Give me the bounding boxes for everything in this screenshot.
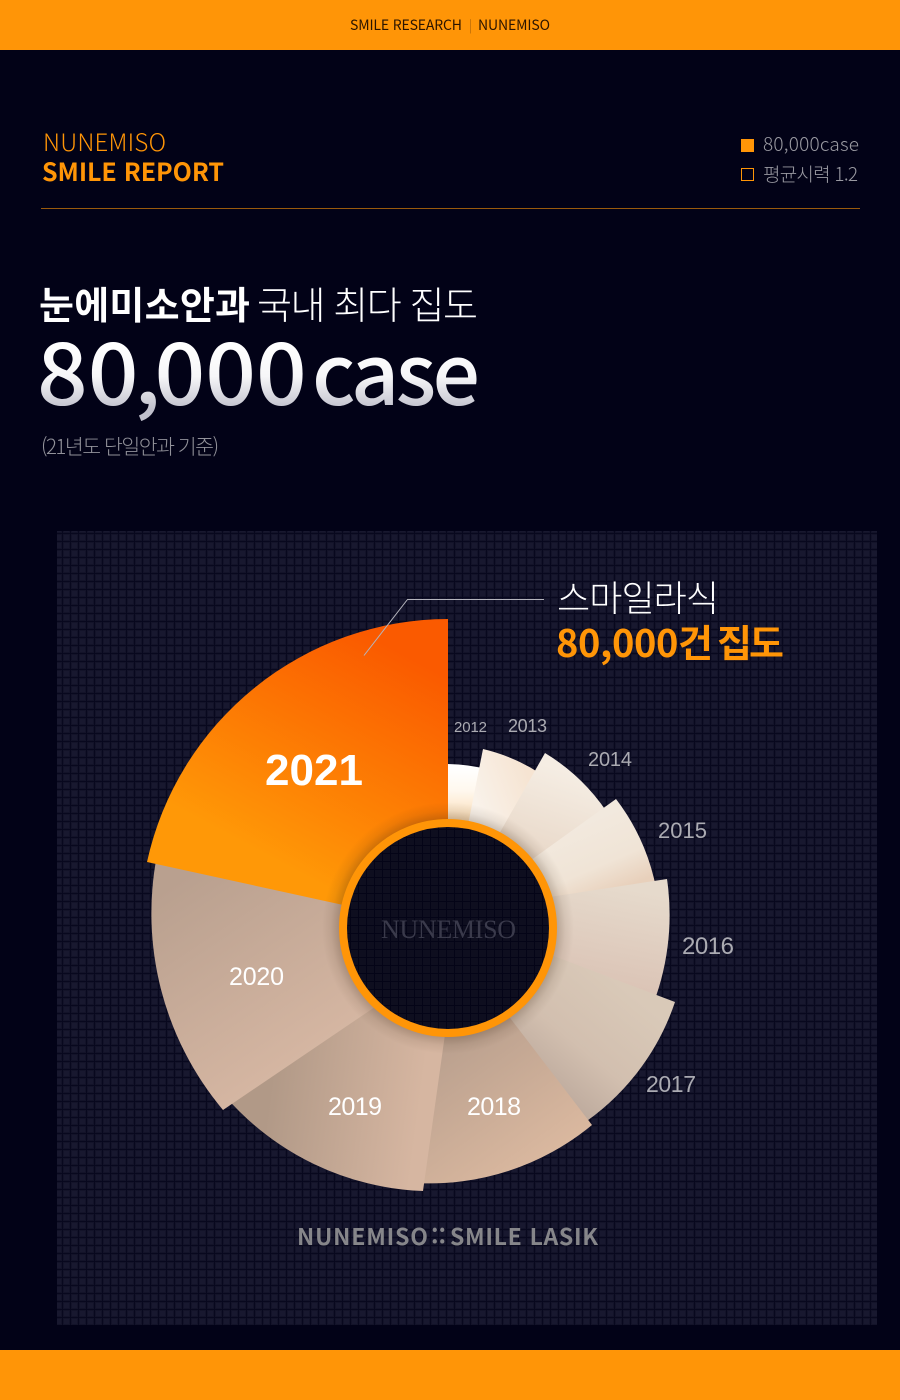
year labels: 2013 <box>508 716 547 736</box>
headline: 눈에미소안과 <box>39 275 250 330</box>
year labels: 2020 <box>229 963 284 991</box>
top bar <box>0 0 900 50</box>
slice 2013 <box>465 749 541 850</box>
report heading <box>42 123 224 189</box>
slice 2012 <box>448 764 490 840</box>
big number: case <box>312 309 480 430</box>
year labels: 2019 <box>328 1093 382 1121</box>
slice 2017 <box>500 947 675 1127</box>
report heading: NUNEMISO <box>43 123 166 158</box>
chart caption: SMILE LASIK <box>450 1218 598 1252</box>
top bar text: | <box>469 15 472 34</box>
slice 2015 <box>520 799 658 920</box>
legend <box>741 130 859 187</box>
footnote: (21년도 단일안과 기준) <box>41 430 219 460</box>
callout value <box>556 613 784 668</box>
slice 2018 <box>415 1010 592 1183</box>
callout leader line <box>364 600 544 656</box>
center brand: NUNEMISO <box>381 915 516 944</box>
big number <box>37 308 480 430</box>
year labels: 2018 <box>467 1093 521 1121</box>
top bar text: SMILE RESEARCH <box>350 15 462 35</box>
year labels: 2017 <box>646 1071 696 1097</box>
ring shadow <box>322 802 574 1054</box>
year labels: 2015 <box>658 818 707 843</box>
bottom bar <box>0 1350 900 1400</box>
callout value: 집도 <box>717 613 784 668</box>
top bar text: NUNEMISO <box>478 15 550 35</box>
big number: 80,000 <box>37 308 307 429</box>
center ring <box>343 823 553 1033</box>
slice 2020 <box>151 855 400 1110</box>
callout value: 80,000건 <box>556 613 713 668</box>
slice 2016 <box>530 879 670 1012</box>
headline: 국내 최다 집도 <box>257 275 478 330</box>
year labels: 2021 <box>265 746 363 795</box>
year labels: 2016 <box>682 933 734 960</box>
report heading: SMILE REPORT <box>42 153 224 189</box>
year labels <box>229 716 734 1121</box>
slice 2021 <box>147 619 448 928</box>
top bar text <box>350 15 550 35</box>
slice 2019 <box>225 1000 447 1191</box>
slice 2014 <box>490 753 612 880</box>
chart caption: :: <box>431 1218 446 1252</box>
legend item: average vision: 평균시력 1.2 <box>763 160 858 187</box>
chart caption <box>297 1218 598 1252</box>
headline <box>39 275 478 330</box>
callout <box>364 570 784 668</box>
radial chart <box>147 619 734 1191</box>
chart caption: NUNEMISO <box>297 1218 428 1252</box>
legend item: case count: 80,000case <box>763 130 859 157</box>
year labels: 2012 <box>454 719 487 736</box>
callout label: 스마일라식 <box>557 570 719 622</box>
year labels: 2014 <box>588 749 632 771</box>
panel: chart background <box>57 531 877 1325</box>
